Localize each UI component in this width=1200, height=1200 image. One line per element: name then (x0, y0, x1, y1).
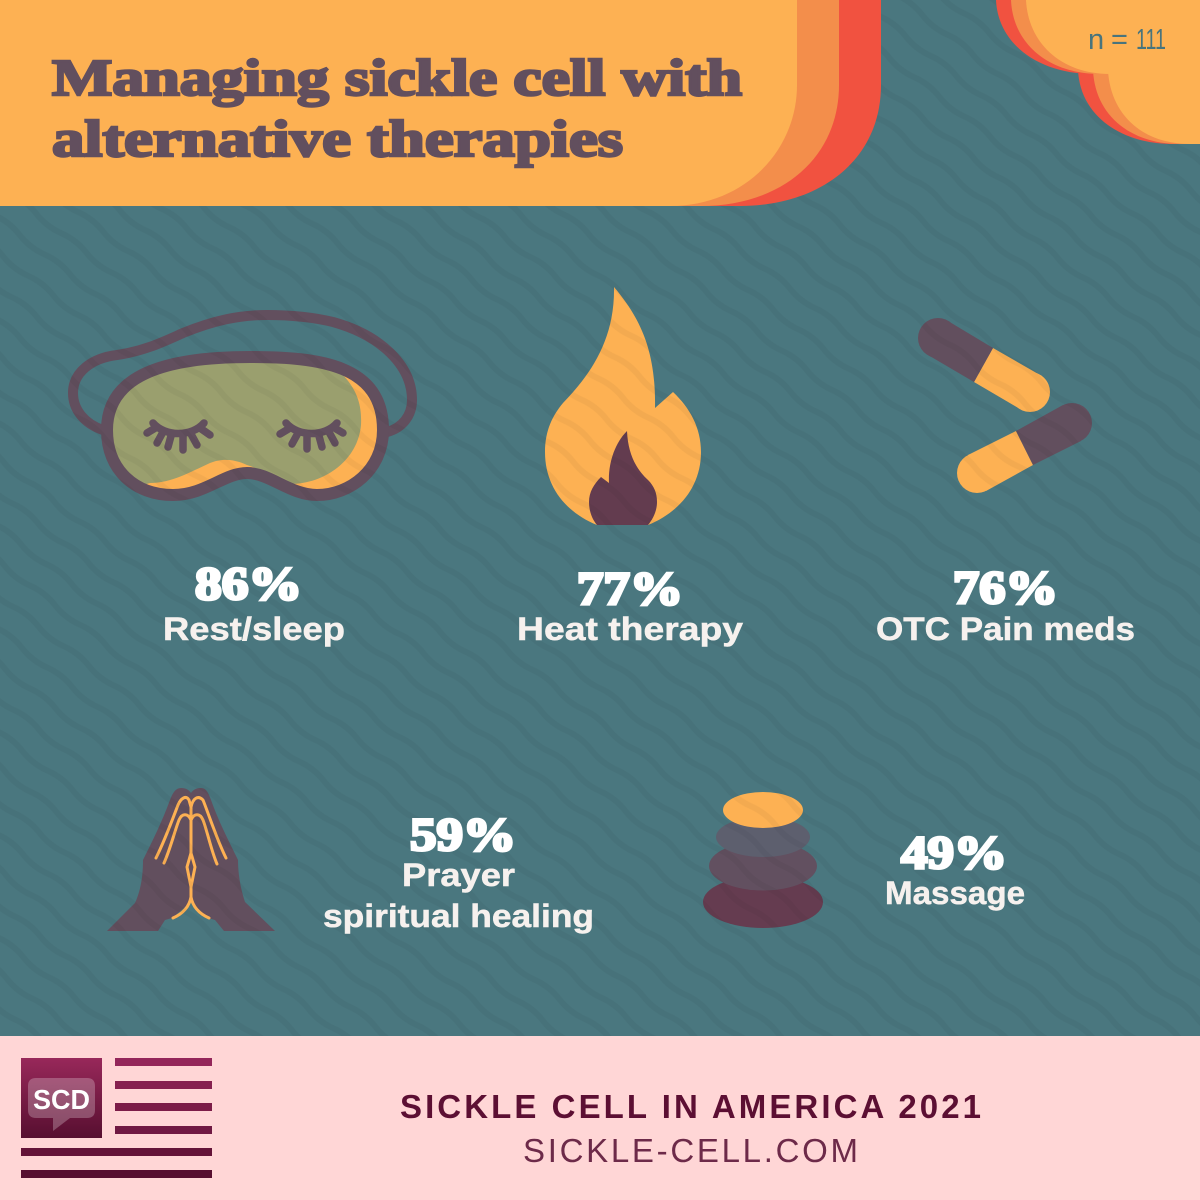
stat: OTC pain meds (876, 562, 1135, 647)
title: Managing sickle cell with (52, 50, 742, 107)
stat: heat therapy: 77% (577, 563, 683, 615)
stat: rest/sleep (163, 558, 345, 647)
stat: prayer: spiritual healing (323, 898, 594, 934)
footer title: SICKLE CELL IN AMERICA 2021 (400, 1088, 981, 1125)
header banner (0, 0, 881, 206)
footer url: SICKLE-CELL.COM (523, 1132, 858, 1169)
stat: massage: Massage (885, 875, 1025, 911)
icon: praying hands (107, 788, 275, 931)
stat: prayer: Prayer (402, 857, 515, 893)
stat: prayer: 59% (410, 809, 516, 861)
sample size text: 111 (1136, 24, 1166, 56)
stat: OTC pain meds: OTC Pain meds (876, 611, 1135, 647)
icon: sleep mask (73, 315, 412, 500)
stat: OTC pain meds: 76% (953, 562, 1058, 614)
icon: massage stones (703, 792, 823, 928)
icon: capsules (918, 318, 1092, 493)
footer (0, 1036, 1200, 1200)
stat: heat therapy (517, 563, 743, 647)
title: alternative therapies (52, 111, 623, 168)
stat: massage: 49% (901, 827, 1007, 879)
sample size badge (996, 0, 1200, 144)
sample size text: = (1111, 24, 1128, 56)
stat: heat therapy: Heat therapy (517, 611, 743, 647)
stat: prayer (323, 809, 594, 934)
icon: flame (545, 287, 701, 525)
sample size text: n (1088, 24, 1104, 56)
stat: rest/sleep: Rest/sleep (163, 611, 345, 647)
logo: SCD flag (21, 1058, 212, 1178)
stat: massage (885, 827, 1025, 911)
stat: rest/sleep: 86% (195, 558, 302, 610)
logo: SCD flag: SCD (33, 1084, 90, 1115)
